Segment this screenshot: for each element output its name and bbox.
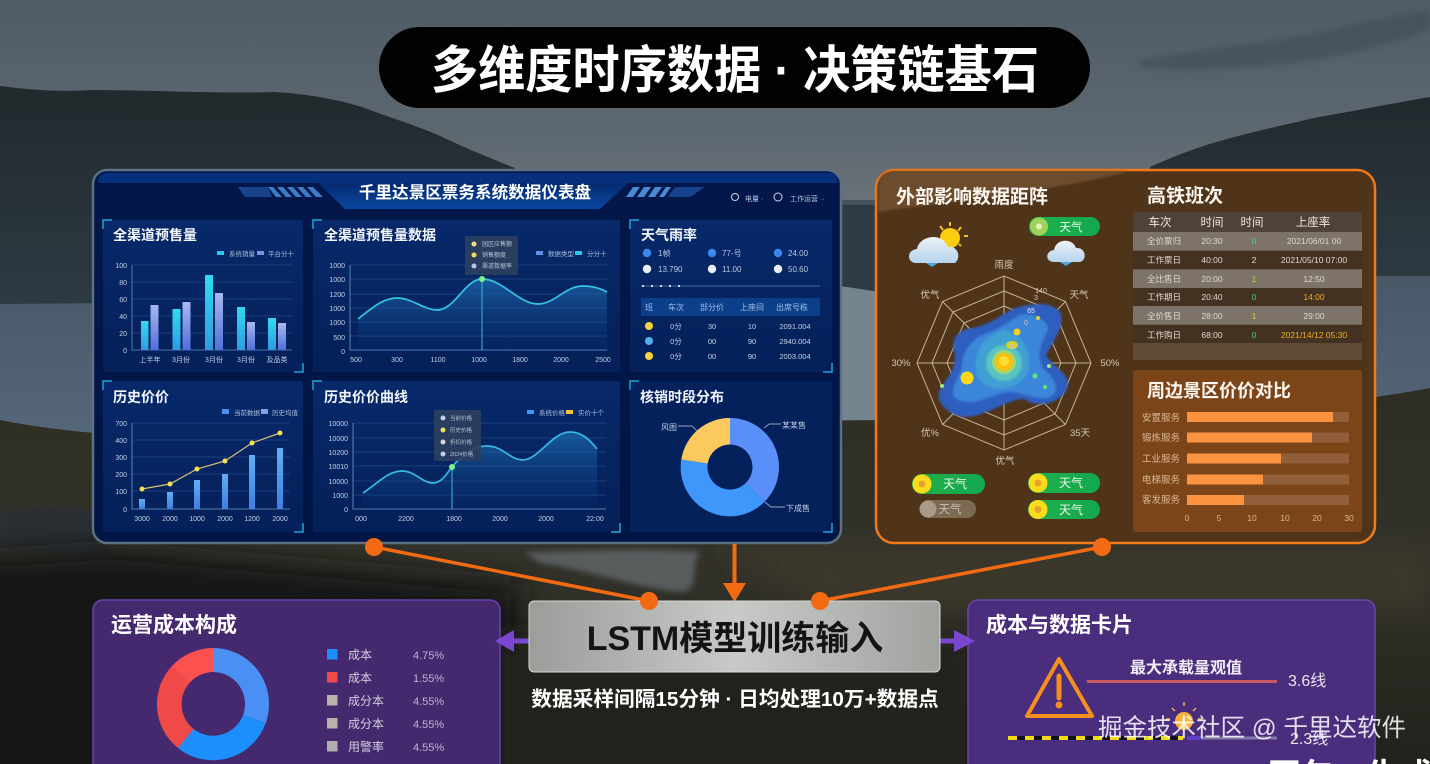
dashboard header banner: 电量 · [745, 194, 763, 203]
chart panel: historical price curve [313, 381, 620, 532]
donut chart: cost [157, 648, 269, 760]
donut chart [661, 418, 810, 516]
chart panel: pre-sale area curve: 2000 [553, 357, 569, 364]
chart panel: pre-sale bars: 80 [119, 280, 127, 287]
chart panel: pre-sale bars: 系统销量 [229, 249, 256, 258]
chart panel: weather rate: 部分价 [700, 302, 724, 312]
legend: cost: 1.55% [413, 673, 444, 685]
chart panel: pre-sale area curve: 1000 [329, 277, 345, 284]
chart panel: historical price curve: 2200 [398, 516, 414, 523]
dashboard header banner: 工作运营 ·· [790, 194, 825, 203]
chart panel: weather rate: 0分 [670, 352, 682, 361]
legend: cost: 4.55% [413, 742, 444, 754]
table: high-speed rail schedule: 工作购日 [1147, 330, 1181, 340]
chart: nearby scenic price comparison: 安置服务 [1142, 412, 1180, 424]
chart panel: historical price bars and line: 2000 [162, 516, 178, 523]
chart: nearby scenic price comparison: 客发服务 [1142, 494, 1180, 506]
legend: cost: 成本 [348, 648, 372, 662]
chart panel: weather rate: 班 [645, 302, 653, 312]
table: high-speed rail schedule: 时间 [1240, 216, 1264, 229]
heading: high-speed rail: 高铁班次 [1147, 184, 1223, 207]
table: high-speed rail schedule: 工作期日 [1147, 292, 1181, 302]
icon: rain cloud [1047, 241, 1085, 266]
radar chart: 0 [1024, 320, 1028, 327]
chart panel: pre-sale area curve: 1100 [430, 357, 446, 364]
chart panel: weather rate: 2091.004 [779, 322, 811, 331]
table: high-speed rail schedule: 0 [1252, 236, 1257, 246]
chart panel: weather rate: 90 [748, 337, 756, 346]
panel: external influence data matrix: 外部影响数据距阵 [896, 185, 1048, 208]
chart panel: historical price bars and line: 700 [115, 421, 127, 428]
table: high-speed rail schedule: 时间 [1200, 216, 1224, 229]
table: high-speed rail schedule: 0 [1252, 330, 1257, 340]
chart: nearby scenic price comparison: 锻炼服务 [1142, 432, 1180, 444]
chart panel: pre-sale bars: 100 [115, 263, 127, 270]
chart panel: pre-sale area curve: 1000 [329, 306, 345, 313]
panel: operating cost composition: 运营成本构成 [111, 613, 237, 637]
chart: nearby scenic price comparison: 10 [1280, 513, 1290, 523]
radar chart: 优% [921, 427, 940, 439]
radar chart: 天气 [1069, 289, 1089, 301]
chart panel: weather rate: 13.790 [658, 265, 683, 274]
chart panel: historical price bars and line: 当前数据 [234, 408, 260, 417]
chart panel: historical price bars and line: 历史价价 [113, 389, 169, 405]
donut chart: 某某售 [782, 420, 806, 430]
chart panel: weather rate: 24.00 [788, 249, 809, 258]
chart panel: weather rate: 1帧 [658, 248, 670, 258]
chart panel: pre-sale area curve: 分分十 [587, 249, 607, 258]
table: high-speed rail schedule: 12:50 [1303, 274, 1325, 284]
table: high-speed rail schedule: 68:00 [1201, 330, 1223, 340]
chart panel: weather rate: 2940.004 [779, 337, 811, 346]
table: high-speed rail schedule: 20:00 [1201, 274, 1223, 284]
chart panel: historical price bars and line: 200 [115, 472, 127, 479]
radar chart: 优气 [920, 289, 940, 301]
dashboard header banner [98, 173, 838, 209]
table: high-speed rail schedule: 20:40 [1201, 292, 1223, 302]
table: high-speed rail schedule: 全比售日 [1147, 274, 1181, 284]
chart panel: historical price bars and line: 2000 [217, 516, 233, 523]
toggles: weather status: 天气 [1059, 475, 1083, 490]
purple arrows to side panels [495, 630, 975, 652]
chart panel: pre-sale area curve: 0 [341, 349, 345, 356]
donut chart: 风图 [661, 423, 677, 432]
chart: nearby scenic price comparison: 工业服务 [1142, 453, 1180, 465]
chart: nearby scenic price comparison: 30 [1344, 513, 1354, 523]
chart panel: pre-sale bars [103, 220, 303, 372]
chart: nearby scenic price comparison: 5 [1217, 513, 1222, 523]
tooltip: price curve [434, 410, 481, 461]
chart panel: weather rate: 2003.004 [779, 352, 811, 361]
chart panel: pre-sale area curve: 300 [391, 357, 403, 364]
chart panel: weather rate: 00 [708, 352, 716, 361]
toggles: weather status: 天气 [938, 502, 962, 516]
tooltip: area curve [465, 236, 518, 275]
panel: operating cost composition [93, 600, 500, 764]
tooltip: price curve: 当前价格 [450, 414, 473, 422]
chart panel: weather rate: 车次 [668, 302, 684, 312]
chart panel: historical price curve: 10200 [329, 450, 348, 457]
chart panel: historical price curve: 10000 [329, 479, 348, 486]
chart panel: historical price bars and line: 1200 [244, 516, 260, 523]
chart panel: historical price curve: 10010 [329, 464, 348, 471]
toggles: weather status: 天气 [1059, 502, 1083, 517]
chart panel: historical price bars and line: 1000 [189, 516, 205, 523]
radar chart: 50% [1100, 358, 1120, 369]
table: high-speed rail schedule: 28:00 [1201, 311, 1223, 321]
toggle: weather top: 天气 [1060, 220, 1083, 234]
panel: external influence data matrix [876, 170, 1375, 543]
legend: cost: 4.55% [413, 696, 444, 708]
radar chart: 140 [1035, 288, 1047, 295]
title pill: 多维度时序数据 · 决策链基石 [431, 42, 1039, 99]
chart panel: weather rate: 0分 [670, 337, 682, 346]
chart panel: pre-sale area curve: 1800 [512, 357, 528, 364]
chart panel: weather rate [630, 220, 832, 372]
table: high-speed rail schedule: 全价票归 [1147, 236, 1181, 246]
chart panel: weather rate: 天气雨率 [641, 227, 697, 243]
icon: sun behind cloud [909, 222, 968, 267]
tooltip: area curve: 园区应售额 [482, 240, 512, 248]
chart panel: pre-sale area curve: 1200 [329, 292, 345, 299]
chart panel: pre-sale area curve [313, 220, 620, 372]
chart panel: weather rate: 30 [708, 322, 716, 331]
radar chart: 65 [1027, 308, 1035, 315]
toggles: weather status: 天气 [943, 476, 967, 491]
chart panel: pre-sale area curve: 1000 [329, 320, 345, 327]
chart panel: pre-sale bars: 60 [119, 297, 127, 304]
legend: cost: 成本 [348, 671, 372, 685]
chart panel: weather rate: 50.60 [788, 265, 809, 274]
chart panel: pre-sale bars: 上半年 [140, 355, 160, 364]
chart panel: weather rate: 90 [748, 352, 756, 361]
panel: cost and data card [968, 600, 1375, 764]
chart panel: historical price curve: 2000 [538, 516, 554, 523]
chart panel: historical price bars and line: 历史均值 [272, 408, 298, 417]
table: high-speed rail schedule: 车次 [1148, 215, 1172, 229]
arrows: orange data connectors [365, 538, 1111, 602]
panel: cost and data card: 3.6线 [1288, 672, 1326, 690]
table: high-speed rail schedule: 0 [1252, 292, 1257, 302]
chart panel: historical price curve: 000 [355, 516, 367, 523]
chart panel: historical price bars and line: 300 [115, 455, 127, 462]
chart panel: historical price bars and line: 3000 [134, 516, 150, 523]
radar chart: 70 [1008, 344, 1016, 351]
chart panel: pre-sale bars: 3月份 [205, 355, 223, 364]
panel: cost and data card: 成本与数据卡片 [986, 613, 1133, 637]
chart: nearby scenic price comparison [1133, 370, 1362, 532]
table: high-speed rail schedule: 2021/06/01 00 [1287, 236, 1341, 246]
chart panel: historical price curve: 1000 [332, 493, 348, 500]
chart panel: pre-sale area curve: 1000 [471, 357, 487, 364]
central box: LSTM model training input: LSTM模型训练输入 [587, 620, 883, 658]
radar chart: 30% [891, 358, 911, 369]
chart panel: pre-sale bars: 全渠道预售量 [113, 227, 197, 243]
chart panel: pre-sale area curve: 2500 [595, 357, 611, 364]
chart panel: pre-sale area curve: 500 [333, 335, 345, 342]
chart panel: historical price bars and line: 100 [115, 489, 127, 496]
legend: cost: 用警率 [348, 739, 384, 754]
legend: cost: 4.75% [413, 650, 444, 662]
chart: nearby scenic price comparison: 电梯服务 [1142, 474, 1180, 486]
chart panel: historical price curve: 10000 [329, 421, 348, 428]
legend: cost: 成分本 [348, 717, 384, 731]
table: high-speed rail schedule: 14:00 [1303, 292, 1325, 302]
connector end dots [640, 592, 829, 610]
chart panel: historical price curve: 实价十个 [578, 408, 604, 417]
table: high-speed rail schedule [1133, 212, 1362, 360]
chart panel: pre-sale bars: 及品类 [266, 355, 288, 364]
chart panel: historical price curve: 10000 [329, 436, 348, 443]
tooltip: price curve: 2024价格 [450, 450, 474, 458]
chart panel: weather rate: 77-号 [722, 249, 742, 258]
chart panel: weather rate: 0分 [670, 322, 682, 331]
chart panel: historical price bars and line: 0 [123, 507, 127, 514]
chart: nearby scenic price comparison: 20 [1312, 513, 1322, 523]
chart panel: historical price bars and line: 2000 [272, 516, 288, 523]
table: high-speed rail schedule: 工作票日 [1147, 255, 1181, 265]
chart panel: weather rate: 出席号栋 [776, 302, 808, 312]
table: high-speed rail schedule: 1 [1252, 274, 1257, 284]
table: high-speed rail schedule: 2021/05/10 07:00 [1281, 255, 1347, 265]
tooltip: price curve: 历史价格 [450, 426, 473, 434]
chart panel: redemption time donut: 核销时段分布 [640, 389, 724, 405]
radar chart: 优气 [995, 455, 1015, 467]
icon: sun [1166, 702, 1202, 730]
legend: cost: 成分本 [348, 694, 384, 708]
toggles: weather status [912, 473, 1100, 519]
watermark: community: 掘金技术社区 @ 千里达软件 [1098, 714, 1406, 742]
chart panel: redemption time donut [630, 381, 832, 532]
legend: cost: 4.55% [413, 719, 444, 731]
chart panel: historical price curve: 0 [344, 507, 348, 514]
table: high-speed rail schedule: 2 [1252, 255, 1257, 265]
legend: cost [327, 648, 444, 754]
tooltip: area curve: 销售额度 [482, 251, 506, 259]
radar chart: 雨度 [994, 259, 1014, 271]
heatmap blob [939, 304, 1068, 417]
chart panel: historical price curve: 1800 [446, 516, 462, 523]
chart panel: historical price bars and line [103, 381, 303, 532]
tooltip: price curve: 折扣价格 [450, 438, 473, 446]
chart: nearby scenic price comparison: 0 [1185, 513, 1190, 523]
dashboard header banner: 千里达景区票务系统数据仪表盘 [359, 182, 591, 202]
tooltip: area curve: 渠道数据率 [482, 262, 512, 270]
chart: nearby scenic price comparison: 周边景区价价对比 [1147, 381, 1291, 401]
radar chart: 3 [1034, 295, 1038, 302]
chart panel: pre-sale bars: 40 [119, 314, 127, 321]
chart panel: pre-sale bars: 平台分十 [268, 249, 294, 258]
chart panel: pre-sale bars: 3月份 [172, 355, 190, 364]
chart panel: weather rate: 11.00 [722, 265, 742, 274]
chart panel: historical price curve: 22:00 [586, 516, 604, 523]
toggle: weather top [1029, 217, 1100, 236]
chart panel: pre-sale area curve: 数据类型 [548, 249, 574, 258]
chart: nearby scenic price comparison: 10 [1247, 513, 1257, 523]
chart panel: historical price curve: 历史价价曲线 [324, 389, 408, 405]
table: high-speed rail schedule: 全价售日 [1147, 311, 1181, 321]
radar chart [891, 259, 1120, 467]
table: high-speed rail schedule: 29:00 [1303, 311, 1325, 321]
panel: ticketing dashboard [93, 170, 841, 543]
chart panel: historical price curve: 系统价格 [539, 408, 566, 417]
panel: cost and data card: 最大承载量观值 [1130, 658, 1242, 677]
chart panel: pre-sale bars: 20 [119, 331, 127, 338]
chart panel: weather rate: 10 [748, 322, 756, 331]
table: high-speed rail schedule: 2021/14/12 05:30 [1281, 330, 1347, 340]
chart panel: weather rate: 00 [708, 337, 716, 346]
chart panel: historical price curve: 2000 [492, 516, 508, 523]
chart panel: pre-sale area curve: 1000 [329, 263, 345, 270]
donut chart: 下成售 [786, 503, 810, 513]
chart panel: pre-sale bars: 0 [123, 348, 127, 355]
chart panel: weather rate: 上座间 [740, 302, 764, 312]
table: high-speed rail schedule: 1 [1252, 311, 1257, 321]
table: high-speed rail schedule: 20:30 [1201, 236, 1223, 246]
panel: cost and data card: 2.3线 [1290, 730, 1328, 748]
chart panel: pre-sale area curve: 500 [350, 357, 362, 364]
radar chart: 35天 [1070, 428, 1091, 439]
chart panel: historical price bars and line: 400 [115, 438, 127, 445]
caption: sampling details: 数据采样间隔15分钟 · 日均处理10万+数据点 [531, 688, 939, 711]
title pill [379, 27, 1090, 108]
chart panel: pre-sale bars: 3月份 [237, 355, 255, 364]
table: high-speed rail schedule: 上座率 [1296, 215, 1330, 229]
icon: warning triangle [1027, 659, 1092, 716]
chart panel: pre-sale area curve: 全渠道预售量数据 [324, 227, 436, 243]
central box: LSTM model training input [529, 601, 940, 672]
table: high-speed rail schedule: 40:00 [1201, 255, 1223, 265]
